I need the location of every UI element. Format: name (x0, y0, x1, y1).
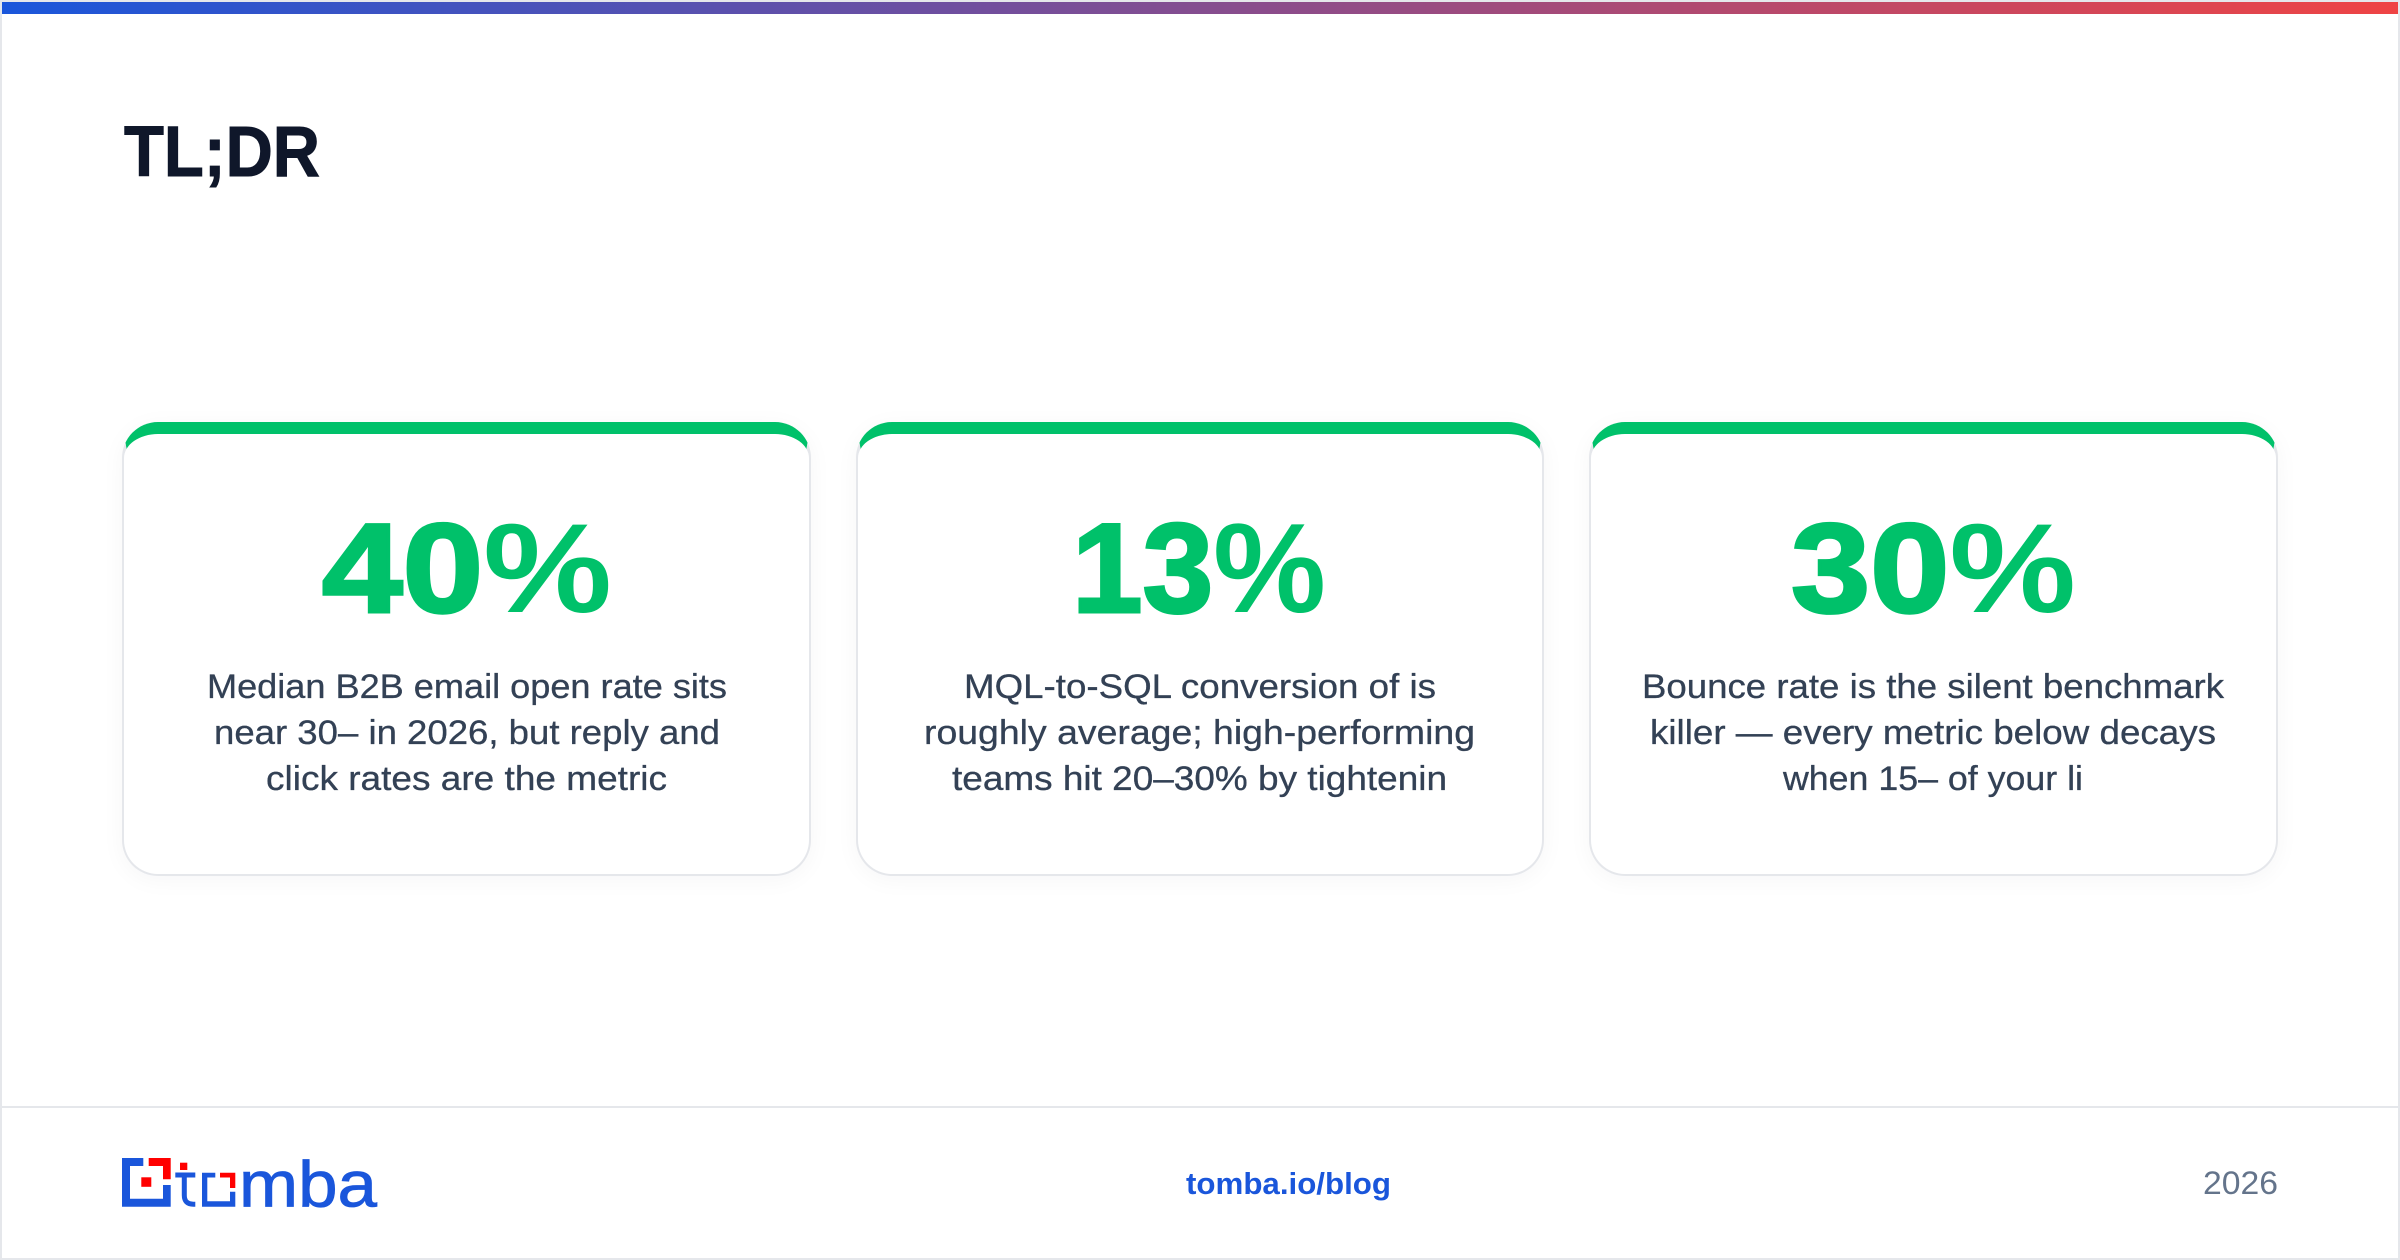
logo letter o red (220, 1173, 235, 1188)
footer logo: tomba (122, 1148, 378, 1221)
card 1 stat: 40% (322, 497, 612, 639)
card 3 description (1642, 668, 2225, 798)
footer divider (2, 1106, 2398, 1108)
icon: red corner mark (149, 1158, 171, 1179)
card 1 description (207, 668, 727, 798)
card 2 description (924, 668, 1475, 798)
card 2 description: teams hit 20–30% by tightenin (952, 760, 1447, 798)
icon: red square (141, 1177, 151, 1187)
card 3 description: when 15– of your li (1782, 760, 2083, 798)
logo dot (180, 1163, 187, 1170)
icon: blue bracket mark (122, 1158, 171, 1207)
card 3 stat: 30% (1791, 497, 2076, 639)
card 2 description: MQL-to-SQL conversion of is (964, 668, 1436, 706)
card 1 description: Median B2B email open rate sits (207, 668, 727, 706)
card 2 description: roughly average; high-performing (924, 714, 1475, 752)
card 3 description: Bounce rate is the silent benchmark (1642, 668, 2225, 706)
panel: card 1 background (122, 422, 811, 876)
logo letter o blue (202, 1173, 235, 1207)
panel: card 2 background (856, 422, 1544, 876)
title: TL;DR (124, 113, 320, 192)
logo wordmark: mba (239, 1148, 378, 1221)
card 1 description: near 30– in 2026, but reply and (214, 714, 720, 752)
panel: card 3 background (1589, 422, 2278, 876)
card 1 description: click rates are the metric (266, 760, 667, 798)
footer year: 2026 (2203, 1165, 2278, 1201)
top gradient bar (2, 2, 2398, 14)
card 2 stat: 13% (1072, 497, 1326, 639)
footer link: tomba.io/blog (1186, 1166, 1391, 1201)
card 3 description: killer — every metric below decays (1650, 714, 2216, 752)
logo letter t (175, 1175, 195, 1204)
